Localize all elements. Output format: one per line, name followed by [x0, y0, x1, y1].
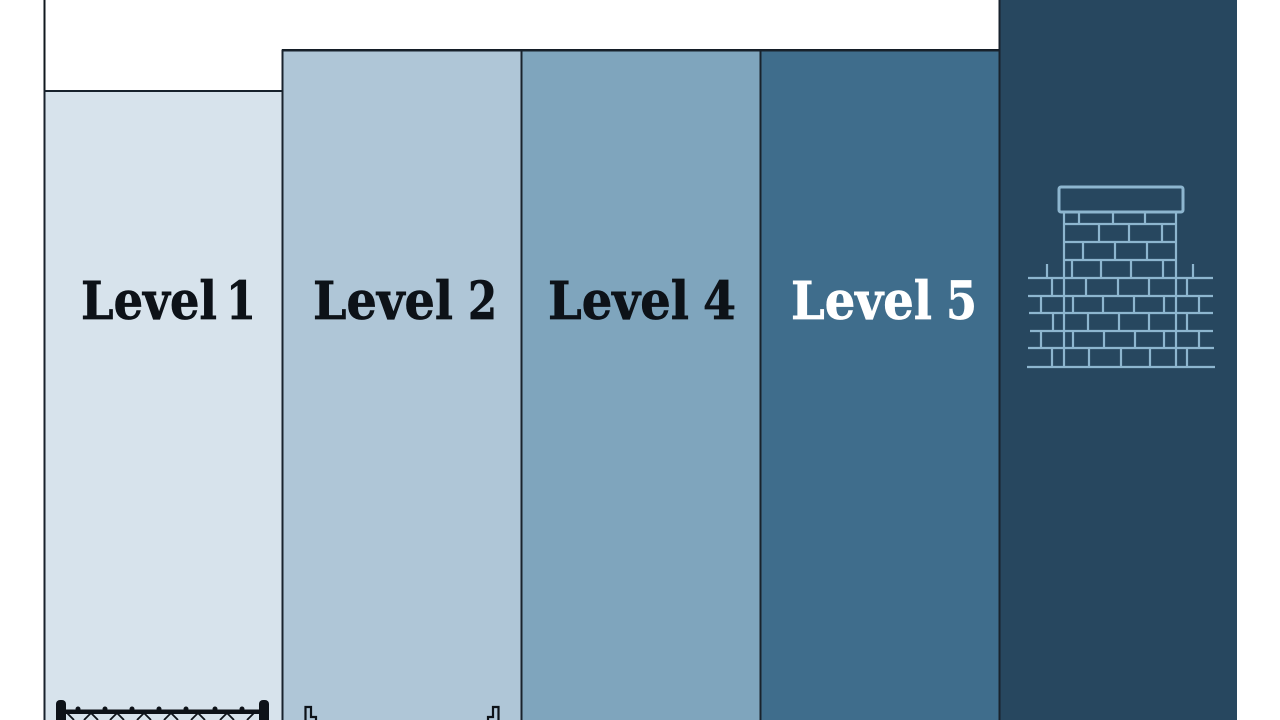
icon: chain-link fence: [56, 700, 269, 720]
panel: level 4 column: [522, 50, 760, 720]
label: Level 4: 4: [703, 271, 736, 332]
panel: level 5 column: [760, 50, 1000, 720]
icon: brick wall: [1027, 187, 1215, 367]
icon: wall posts: [306, 707, 498, 720]
label: Level 1: 1: [226, 271, 256, 332]
panel: top level column: [999, 0, 1237, 720]
label: Level 2: Level: [313, 271, 453, 332]
panel: level 1 column: [44, 91, 282, 720]
panel: level 2 column: [282, 50, 522, 720]
label: Level 1: Level: [81, 271, 217, 332]
label: Level 5: Level: [791, 271, 932, 332]
label: Level 2: 2: [468, 271, 497, 332]
label: Level 4: Level: [548, 271, 689, 332]
label: Level 5: 5: [946, 271, 977, 332]
